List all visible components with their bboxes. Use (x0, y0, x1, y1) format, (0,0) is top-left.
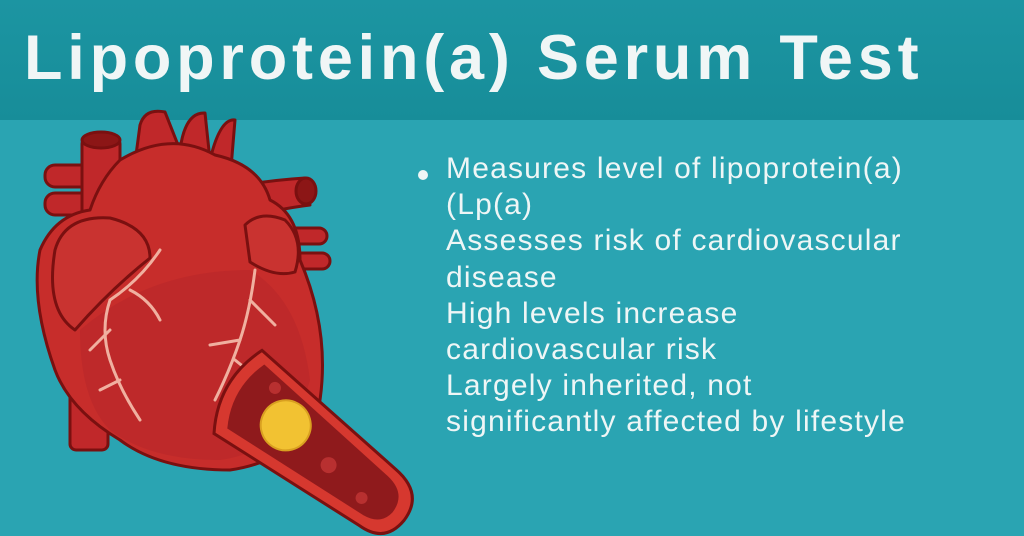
artery cross-section with plaque (200, 344, 442, 536)
title: Lipoprotein(a) Serum Test (24, 23, 923, 93)
bullet text: cardiovascular risk (446, 333, 717, 366)
header band (0, 0, 1024, 120)
bullet text: (Lp(a) (446, 188, 533, 221)
bullet text: High levels increase (446, 297, 738, 330)
coronary branches (90, 250, 275, 420)
bullet text: Measures level of lipoprotein(a) (446, 152, 903, 185)
bullet text: Assesses risk of cardiovascular (446, 224, 902, 257)
heart illustration (36, 110, 414, 536)
bullet marker (418, 170, 428, 180)
bullet text: disease (446, 261, 558, 294)
bullet text: significantly affected by lifestyle (446, 405, 906, 438)
bullet text (446, 152, 906, 438)
bullet text: Largely inherited, not (446, 369, 753, 402)
